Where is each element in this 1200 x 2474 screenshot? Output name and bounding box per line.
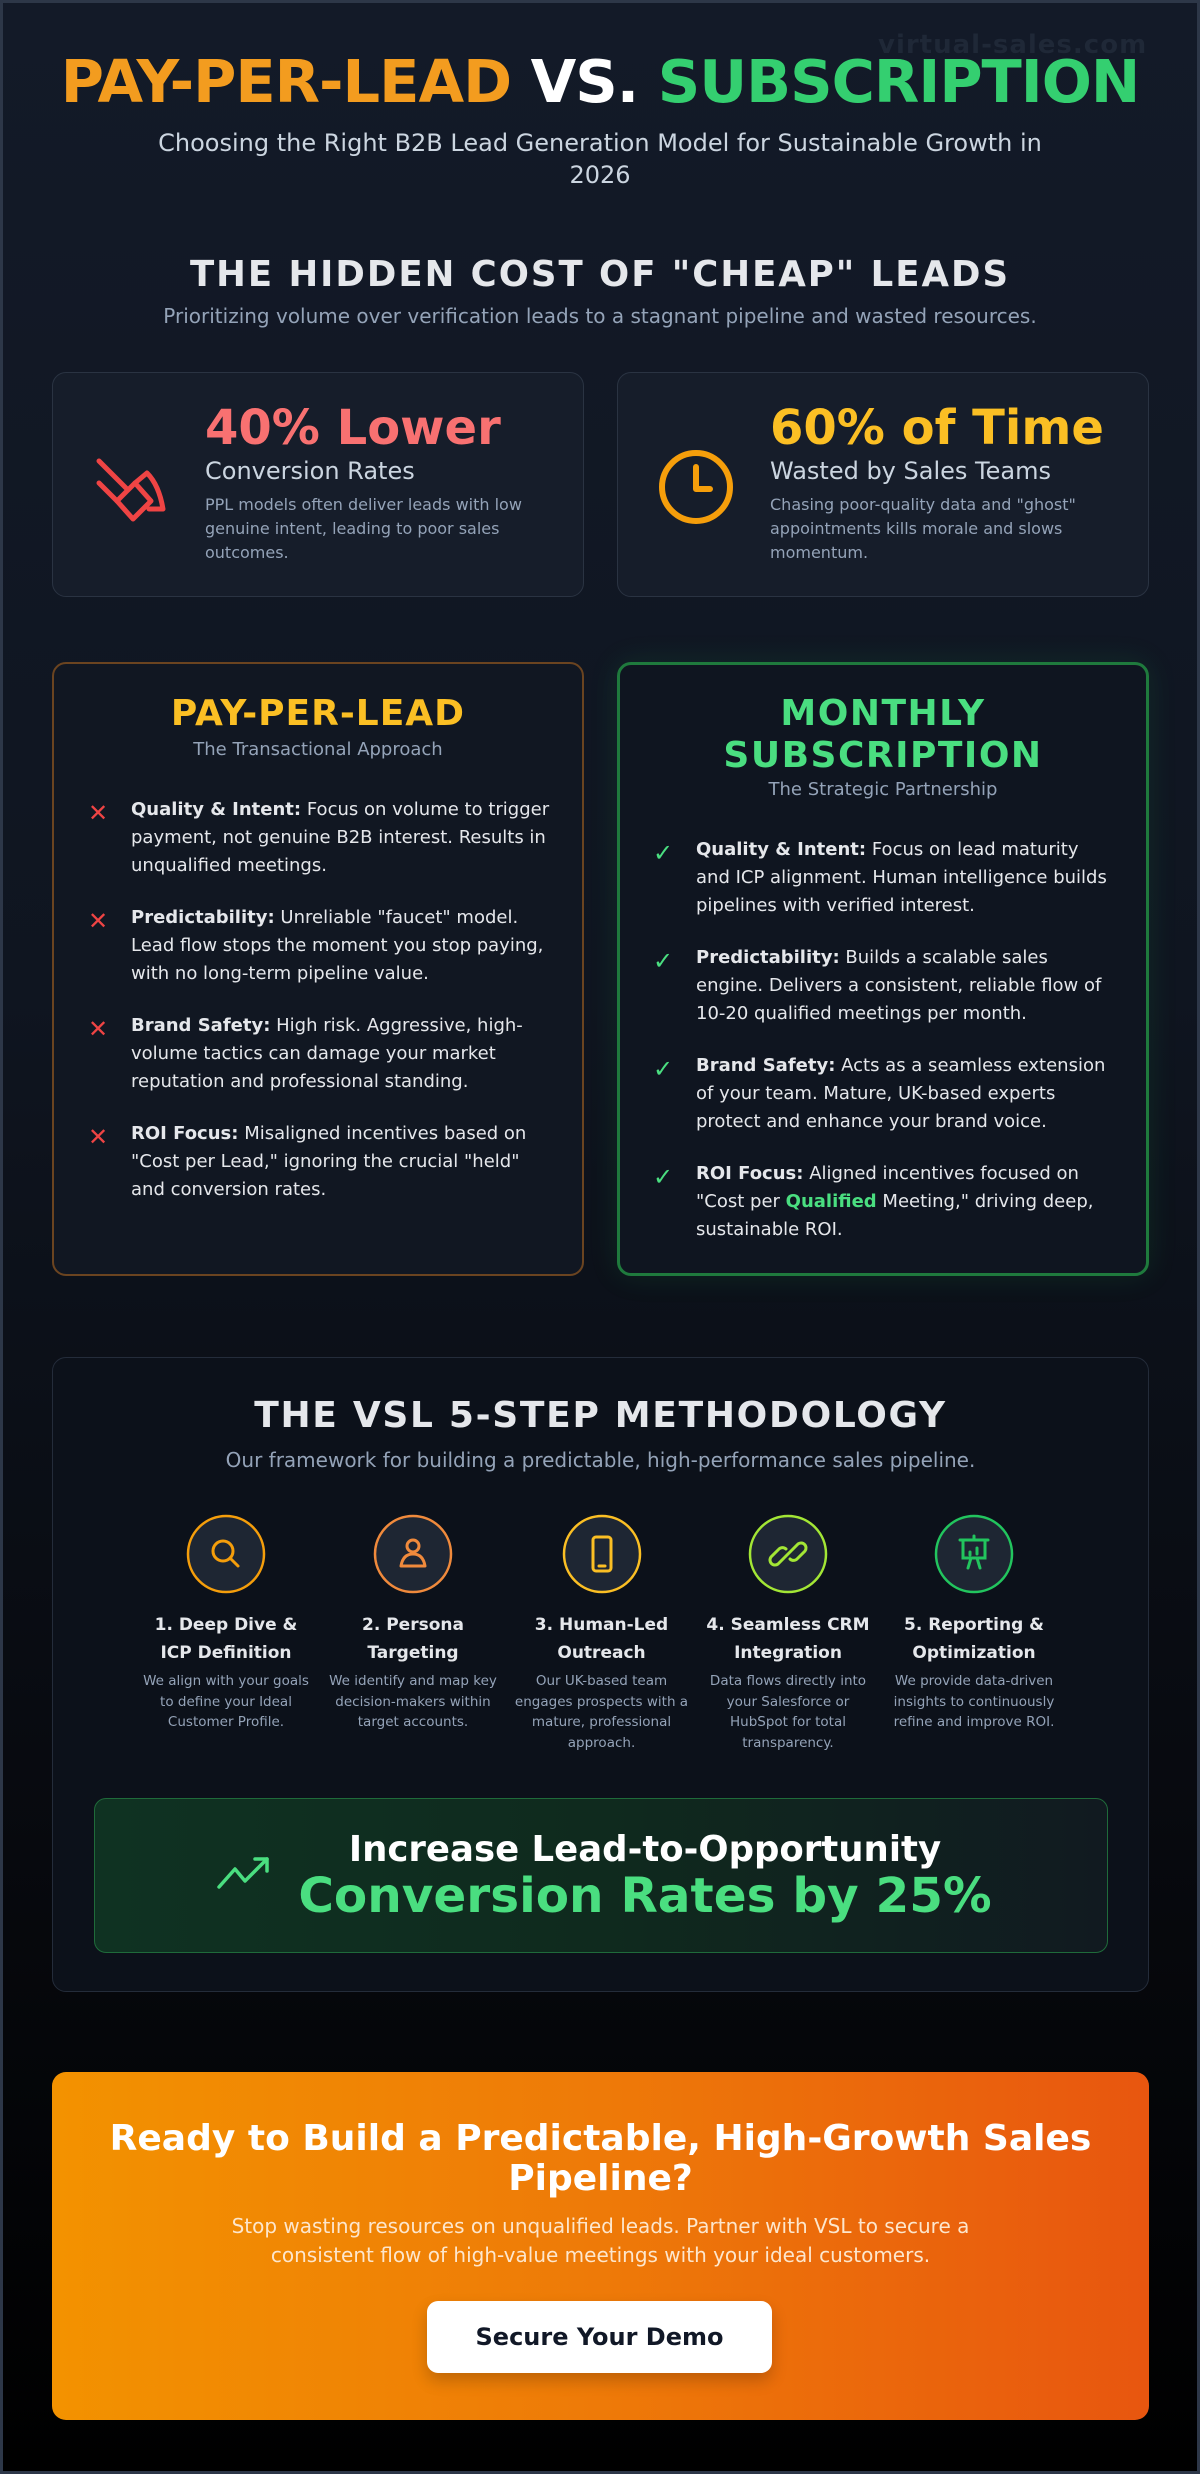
panel: pay-per-lead: ✕	[88, 799, 108, 827]
title: PAY-PER-LEAD VS. SUBSCRIPTION	[61, 47, 1139, 116]
panel: methodology	[52, 1357, 1149, 1992]
step 5: We provide data-driven insights to continuously refine and improve ROI.	[894, 1673, 1054, 1730]
icon: presentation	[934, 1514, 1014, 1594]
step 2: We identify and map key decision-makers within target accounts.	[329, 1673, 497, 1730]
heading: SUBSCRIPTION	[723, 735, 1043, 776]
icon: thumbs down	[96, 458, 166, 522]
heading: hidden cost: THE HIDDEN COST OF "CHEAP" LEADS	[190, 254, 1010, 295]
step 3: Outreach	[557, 1643, 646, 1663]
button: Secure Your Demo	[476, 2323, 723, 2351]
subheading: hidden cost: Prioritizing volume over verification leads to a stagnant pipeline and wasted resources.	[163, 304, 1037, 328]
subheading: The Transactional Approach	[193, 739, 443, 760]
panel: pay-per-lead: ✕	[88, 1123, 108, 1151]
step 5: Optimization	[912, 1643, 1036, 1663]
stat card: 40% lower	[52, 372, 584, 597]
panel: monthly subscription: Predictability: Builds a scalable sales engine. Delivers a consistent, reliable flow of 10-20 qualified meetings per month.	[696, 947, 1101, 1024]
panel: call to action	[52, 2072, 1149, 2420]
panel: pay-per-lead: ✕	[88, 1015, 108, 1043]
watermark: virtual-sales.com	[878, 30, 1147, 60]
panel: pay-per-lead: Brand Safety: High risk. Aggressive, high-volume tactics can damage your market reputation and professional standing.	[131, 1015, 523, 1092]
stat text	[205, 400, 522, 562]
step 3: 3. Human-Led	[535, 1615, 668, 1635]
icon: link	[748, 1514, 828, 1594]
callout: conversion increase	[94, 1798, 1108, 1953]
step 1: 1. Deep Dive &	[155, 1615, 297, 1635]
icon: clock	[659, 450, 733, 524]
step 4	[706, 1514, 870, 1750]
stat card: 60% of time	[617, 372, 1149, 597]
panel: monthly subscription: ✓	[653, 1055, 673, 1083]
stat text: PPL models often deliver leads with low genuine intent, leading to poor sales outcomes.	[205, 495, 522, 562]
subheading: Our framework for building a predictable, high-performance sales pipeline.	[226, 1448, 975, 1472]
panel: monthly subscription	[617, 662, 1149, 1276]
panel: monthly subscription: ✓	[653, 1163, 673, 1191]
step 2: Targeting	[367, 1643, 459, 1663]
panel: pay-per-lead: ROI Focus: Misaligned incentives based on "Cost per Lead," ignoring the crucial "held" and conversion rates.	[131, 1123, 526, 1200]
list: pros	[653, 839, 1107, 1240]
panel: monthly subscription: Brand Safety: Acts as a seamless extension of your team. Mature, UK-based experts protect and enhance your brand voice.	[696, 1055, 1105, 1132]
heading: MONTHLY	[780, 693, 986, 734]
step 2: 2. Persona	[362, 1615, 464, 1635]
subheading: The Strategic Partnership	[769, 779, 997, 800]
cta heading: Ready to Build a Predictable, High-Growth Sales Pipeline?	[110, 2118, 1091, 2199]
stat text: Conversion Rates	[205, 457, 415, 485]
step 1: ICP Definition	[160, 1643, 292, 1663]
stat text: Chasing poor-quality data and "ghost" appointments kills morale and slows momentum.	[770, 495, 1076, 562]
heading: THE VSL 5-STEP METHODOLOGY	[254, 1395, 947, 1436]
panel: pay-per-lead	[52, 662, 584, 1276]
stat text	[770, 400, 1104, 562]
panel: monthly subscription: ROI Focus: Aligned incentives focused on "Cost per Qualified Meeting," driving deep, sustainable ROI.	[696, 1163, 1093, 1240]
icon: phone	[562, 1514, 642, 1594]
step 5	[894, 1514, 1054, 1730]
panel: pay-per-lead: Quality & Intent: Focus on volume to trigger payment, not genuine B2B interest. Results in unqualified meetings.	[131, 799, 549, 876]
callout: conversion increase: Conversion Rates by 25%	[298, 1868, 992, 1924]
panel: monthly subscription: ✓	[653, 839, 673, 867]
panel: pay-per-lead: ✕	[88, 907, 108, 935]
stat text: Wasted by Sales Teams	[770, 457, 1051, 485]
icon: person	[374, 1514, 452, 1594]
list: cons	[88, 799, 550, 1200]
subtitle: Choosing the Right B2B Lead Generation Model for Sustainable Growth in 2026	[158, 129, 1042, 189]
callout: conversion increase: Increase Lead-to-Opportunity	[349, 1829, 941, 1870]
step 3: Our UK-based team engages prospects with a mature, professional approach.	[515, 1673, 688, 1750]
heading	[723, 693, 1043, 776]
icon: search	[186, 1514, 266, 1594]
step 5: 5. Reporting &	[904, 1615, 1044, 1635]
step 1	[143, 1514, 309, 1730]
step 4: Integration	[734, 1643, 842, 1663]
stat text: 60% of Time	[770, 400, 1104, 456]
heading: PAY-PER-LEAD	[171, 693, 465, 734]
step 3	[515, 1514, 688, 1750]
icon: trending arrow	[217, 1857, 269, 1889]
panel: monthly subscription: ✓	[653, 947, 673, 975]
panel: pay-per-lead: Predictability: Unreliable "faucet" model. Lead flow stops the moment you stop paying, with no long-term pipeline value.	[131, 907, 543, 984]
panel: monthly subscription: Quality & Intent: Focus on lead maturity and ICP alignment. Human intelligence builds pipelines with verified interest.	[696, 839, 1107, 916]
step 4: Data flows directly into your Salesforce or HubSpot for total transparency.	[710, 1673, 866, 1750]
step 4: 4. Seamless CRM	[706, 1615, 870, 1635]
stat text: 40% Lower	[205, 400, 501, 456]
step 1: We align with your goals to define your Ideal Customer Profile.	[143, 1673, 309, 1730]
button	[427, 2301, 772, 2373]
cta text: Stop wasting resources on unqualified leads. Partner with VSL to secure a consistent flow of high-value meetings with your ideal customers.	[232, 2214, 969, 2267]
step 2	[329, 1514, 497, 1730]
